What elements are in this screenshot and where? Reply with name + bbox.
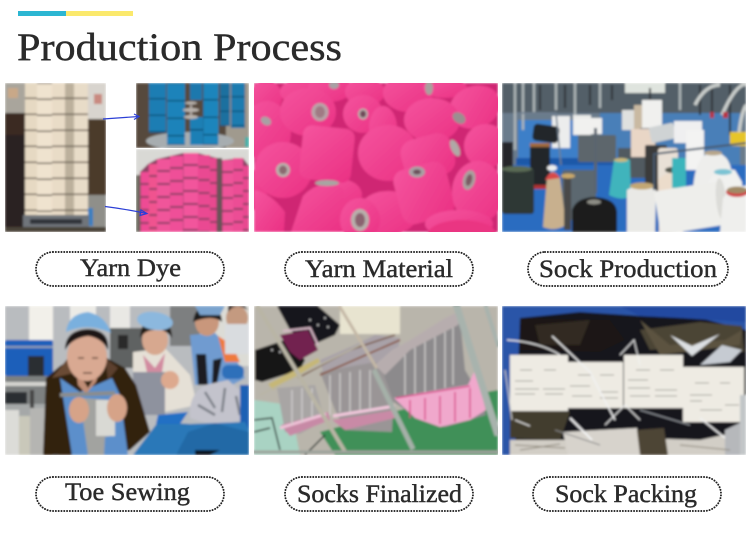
woman in brown jacket bbox=[43, 312, 150, 455]
woman in white coat bbox=[133, 310, 197, 415]
front yarn cones bbox=[502, 113, 748, 235]
floor bbox=[254, 400, 300, 455]
header accent bar bbox=[18, 11, 133, 16]
floor and machine tables bbox=[502, 165, 746, 232]
small print on label cards bbox=[515, 370, 739, 410]
label: Sock Packing: Sock Packing bbox=[555, 481, 698, 508]
label: Socks Finalized: Socks Finalized bbox=[297, 481, 463, 508]
panel: toe sewing photo bbox=[5, 306, 249, 456]
front row of pink cones bbox=[254, 88, 504, 242]
photo: blue dyed cones bbox=[136, 83, 249, 150]
arrow: raw yarn to blue cones bbox=[103, 114, 139, 120]
dark socks on upper rack bbox=[255, 306, 340, 390]
label: Toe Sewing bbox=[36, 477, 224, 511]
photo: pink dyed cones bbox=[136, 149, 249, 232]
panel: yarn material photo bbox=[254, 83, 498, 232]
bundle of grey-white socks bbox=[190, 380, 245, 424]
steel rack poles bbox=[254, 307, 498, 452]
hanging grey socks bbox=[5, 406, 59, 455]
yarn cone holes bbox=[259, 81, 477, 231]
plastic film highlights bbox=[505, 334, 742, 445]
photo: stacked raw yarn cones bbox=[5, 83, 106, 232]
label: Yarn Material: Yarn Material bbox=[305, 256, 453, 283]
title: Production Process bbox=[17, 26, 342, 69]
factory background machinery bbox=[502, 83, 746, 113]
worker in blue apron bbox=[190, 306, 249, 385]
racks of grey socks with pink bands bbox=[277, 310, 486, 436]
panel: yarn dye photo collage bbox=[5, 83, 249, 232]
panel: sock production photo bbox=[502, 83, 748, 235]
label: Yarn Dye bbox=[36, 252, 224, 286]
blue bag edge bbox=[502, 306, 746, 455]
label: Sock Production bbox=[528, 252, 728, 286]
label: Toe Sewing: Toe Sewing bbox=[65, 479, 191, 506]
product label cards bbox=[510, 355, 744, 422]
arrow: raw yarn to pink cones bbox=[105, 206, 147, 216]
blue denim cloth bbox=[133, 385, 249, 455]
label: Yarn Dye: Yarn Dye bbox=[80, 255, 181, 282]
white spools and blue bin bbox=[5, 306, 130, 376]
label: Yarn Material bbox=[285, 252, 473, 286]
label: Socks Finalized bbox=[285, 477, 473, 511]
sewing machinery bbox=[5, 328, 150, 455]
panel: sock packing photo bbox=[502, 306, 746, 455]
label: Sock Production: Sock Production bbox=[539, 256, 718, 283]
back row of pink cones bbox=[254, 83, 498, 232]
lower plastic and cream socks bbox=[510, 408, 570, 440]
panel: socks finalized photo bbox=[254, 306, 498, 455]
label: Sock Packing bbox=[533, 477, 721, 511]
mid-ground yarn spools bbox=[552, 100, 704, 200]
